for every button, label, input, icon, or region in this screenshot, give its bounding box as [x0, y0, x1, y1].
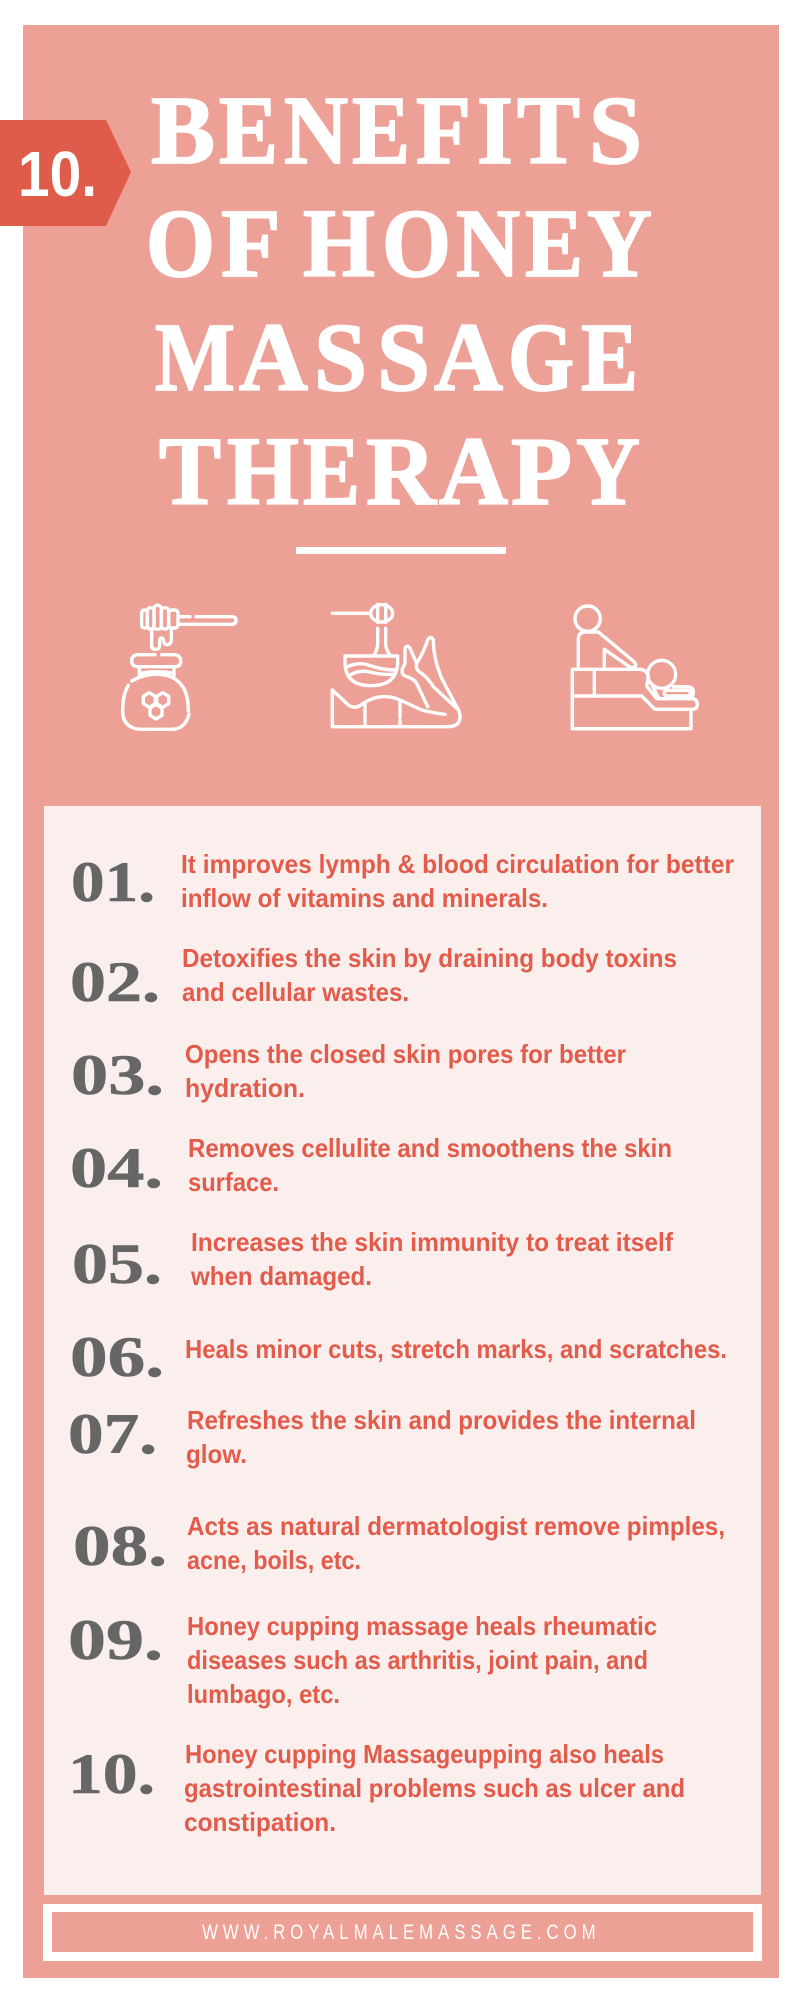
- title: O: [382, 190, 451, 297]
- title: E: [219, 77, 278, 184]
- title: O: [146, 190, 215, 297]
- title: N: [284, 77, 348, 184]
- item 03: hydration.: [185, 1073, 305, 1103]
- item 08: [73, 1511, 725, 1578]
- title: E: [525, 190, 583, 297]
- item 09: 09.: [68, 1609, 163, 1672]
- item 05: when damaged.: [190, 1261, 372, 1291]
- item 09: Honey cupping massage heals rheumatic: [187, 1611, 657, 1641]
- title: F: [416, 77, 471, 184]
- title: R: [366, 418, 437, 525]
- title: A: [239, 304, 308, 411]
- title: S: [314, 304, 367, 411]
- item 04: surface.: [188, 1167, 279, 1197]
- item 06: [70, 1326, 727, 1389]
- item 05: Increases the skin immunity to treat itself: [191, 1227, 673, 1257]
- item 09: [68, 1609, 657, 1709]
- item 02: Detoxifies the skin by draining body toxins: [182, 943, 677, 973]
- item 02: 02.: [70, 951, 160, 1014]
- item 04: 04.: [70, 1137, 163, 1200]
- item 08: Acts as natural dermatologist remove pimples,: [187, 1511, 725, 1541]
- item 03: Opens the closed skin pores for better: [185, 1039, 626, 1069]
- title: T: [517, 77, 580, 184]
- item 04: Removes cellulite and smoothens the skin: [188, 1133, 672, 1163]
- item 10: constipation.: [184, 1807, 336, 1837]
- title: I: [477, 77, 513, 184]
- icon: honey bowl over legs: [332, 604, 460, 727]
- title: E: [581, 304, 638, 411]
- title: B: [151, 77, 215, 184]
- footer: website banner: [43, 1904, 762, 1961]
- item 06: Heals minor cuts, stretch marks, and scratches.: [185, 1334, 727, 1364]
- item 05: [72, 1227, 673, 1296]
- item 10: gastrointestinal problems such as ulcer and: [184, 1773, 685, 1803]
- panel: benefits list: [44, 806, 761, 1895]
- item 10: Honey cupping Massageupping also heals: [185, 1739, 664, 1769]
- title: E: [352, 77, 410, 184]
- item 09: lumbago, etc.: [187, 1679, 340, 1709]
- item 10: 10.: [68, 1743, 155, 1806]
- item 08: acne, boils, etc.: [187, 1545, 361, 1575]
- item 02: [70, 943, 677, 1014]
- item 01: inflow of vitamins and minerals.: [181, 883, 548, 913]
- item 07: 07.: [68, 1403, 157, 1466]
- title: A: [439, 418, 508, 525]
- title: E: [303, 418, 360, 525]
- title: A: [434, 304, 503, 411]
- item 01: 01.: [71, 851, 155, 914]
- item 07: Refreshes the skin and provides the internal: [187, 1405, 696, 1435]
- icon: honey dipper and jar: [123, 605, 236, 729]
- item 07: [68, 1403, 696, 1469]
- footer: website banner: WWW.ROYALMALEMASSAGE.COM: [202, 1921, 596, 1945]
- title: [146, 77, 652, 525]
- item 03: 03.: [71, 1044, 164, 1107]
- item 05: 05.: [72, 1233, 162, 1296]
- item 09: diseases such as arthritis, joint pain, and: [187, 1645, 648, 1675]
- item 01: [71, 849, 734, 914]
- title: G: [508, 304, 574, 411]
- item 07: glow.: [186, 1439, 247, 1469]
- item 10: [68, 1739, 685, 1837]
- title: F: [221, 190, 277, 297]
- badge: number 10: 10.: [18, 138, 97, 210]
- icon: massage therapist and client: [572, 606, 697, 729]
- title: S: [589, 77, 642, 184]
- title: Y: [576, 418, 640, 525]
- title: T: [159, 418, 221, 525]
- title: N: [456, 190, 520, 297]
- item 04: [70, 1133, 672, 1200]
- title: Y: [587, 190, 652, 297]
- item 03: [71, 1039, 626, 1107]
- item 08: 08.: [73, 1515, 167, 1578]
- title: M: [155, 304, 235, 411]
- item 02: and cellular wastes.: [182, 977, 409, 1007]
- title: S: [377, 304, 430, 411]
- item 01: It improves lymph & blood circulation for better: [181, 849, 734, 879]
- title: H: [227, 418, 299, 525]
- badge: number 10: [0, 120, 131, 226]
- title underline: [296, 547, 506, 554]
- title: H: [303, 190, 375, 297]
- item 06: 06.: [70, 1326, 164, 1389]
- title: P: [511, 418, 572, 525]
